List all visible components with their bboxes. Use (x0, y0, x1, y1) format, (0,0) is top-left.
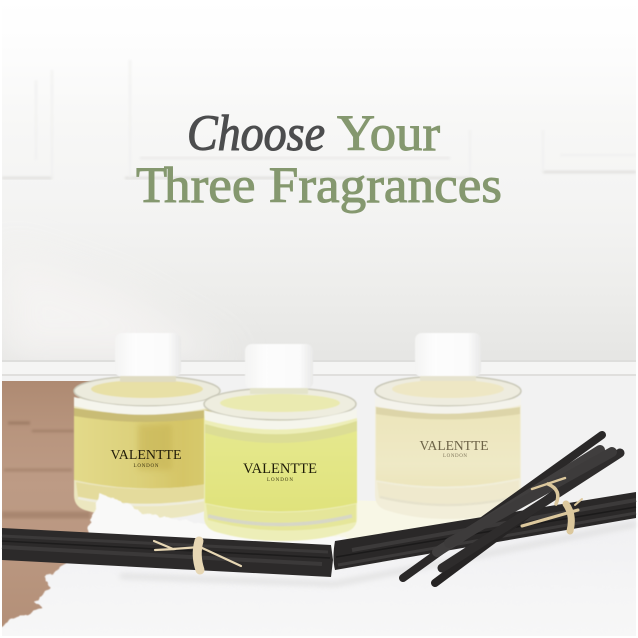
bottle: right (375, 333, 521, 519)
liquid (74, 412, 219, 489)
cap (115, 333, 181, 377)
label: LONDON (443, 454, 467, 459)
title: Your (337, 106, 440, 162)
reed shadow (120, 524, 636, 584)
title: Choose (187, 106, 325, 162)
label: LONDON (267, 478, 293, 483)
label: LONDON (134, 464, 159, 469)
reeds: middle bundle (334, 492, 636, 570)
label: VALENTTE (243, 461, 317, 477)
white towel lower (0, 512, 638, 638)
title: hree Fragrances (164, 158, 502, 214)
white cloth surface (2, 376, 636, 638)
white towel upper (88, 494, 360, 565)
bottle: left (74, 333, 220, 519)
liquid (205, 428, 357, 512)
title: T (136, 158, 167, 214)
liquid (376, 412, 520, 487)
label: VALENTTE (420, 438, 488, 453)
bottle: centre (204, 344, 357, 541)
shoulder (375, 376, 521, 406)
twine ties (522, 478, 582, 531)
wooden table (2, 381, 110, 638)
title (136, 106, 502, 214)
label: VALENTTE (110, 448, 182, 463)
twine (154, 541, 241, 570)
shoulder (74, 376, 220, 406)
cream reflection under bottles (330, 500, 530, 555)
cap (245, 344, 313, 389)
reeds: left bundle (2, 528, 333, 577)
shoulder (204, 388, 356, 420)
cap (415, 333, 481, 377)
reeds: crossing bundle (403, 435, 620, 583)
